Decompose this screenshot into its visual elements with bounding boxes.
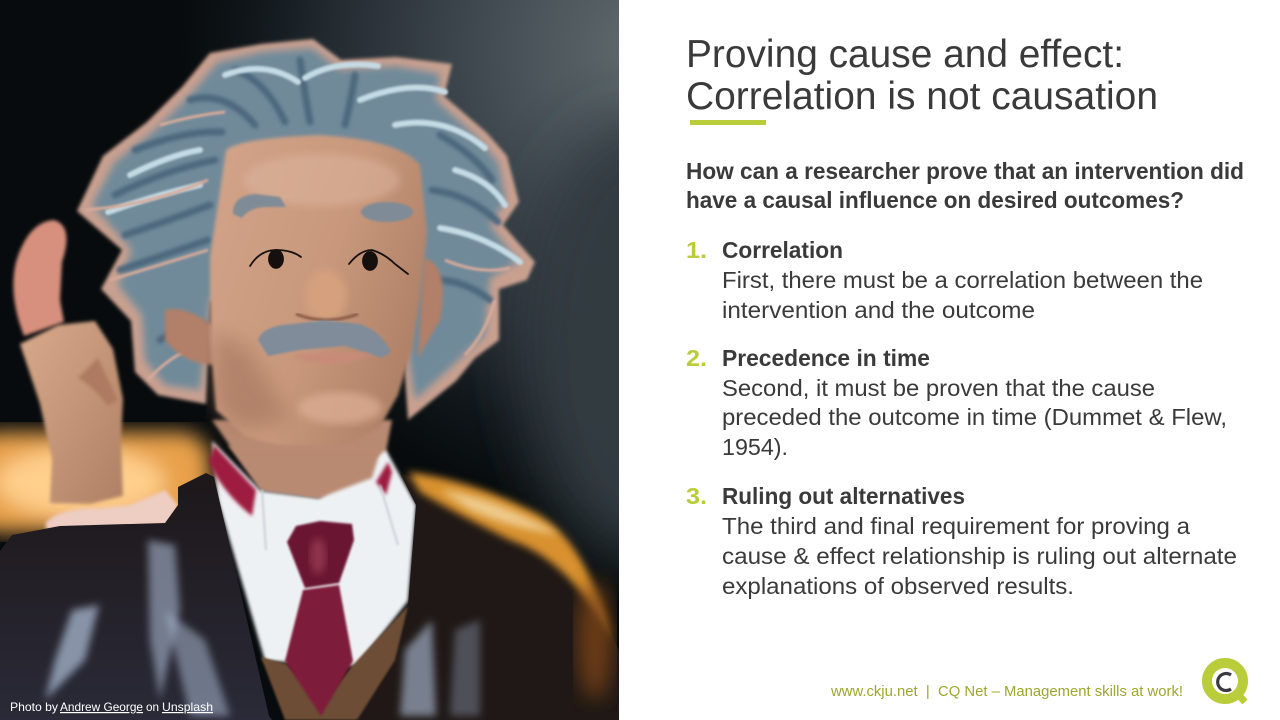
neck inner V [228, 445, 382, 498]
nose [296, 270, 358, 322]
item 3: ruling out alternatives: explanations of observed results. [722, 573, 1074, 599]
title: Proving cause and effect: [686, 33, 1124, 76]
eyes [250, 250, 408, 274]
question [686, 158, 1244, 213]
neck [212, 420, 392, 498]
photo: Einstein figurine [0, 0, 619, 720]
question: How can a researcher prove that an intervention did [686, 158, 1244, 184]
item 3: ruling out alternatives: Ruling out alternatives [722, 483, 965, 509]
item 3: ruling out alternatives [686, 483, 1237, 599]
photo credit [10, 700, 213, 714]
footer: www.ckju.net | CQ Net – Management skills at work! [830, 684, 1183, 700]
forehead highlight [244, 154, 400, 206]
jacket [0, 472, 619, 720]
warm background glow [0, 432, 210, 532]
shirt [212, 441, 416, 666]
item 3: ruling out alternatives: The third and final requirement for proving a [722, 513, 1190, 539]
photo background [0, 0, 619, 720]
jacket blue-white reflections [45, 540, 480, 716]
item 3: ruling out alternatives: cause & effect relationship is ruling out alternate [722, 543, 1237, 569]
background right-side haze [520, 120, 760, 560]
collar stripes [209, 445, 392, 516]
moustache [258, 320, 391, 358]
item 2: precedence in time [686, 345, 1227, 460]
question: have a causal influence on desired outcomes? [686, 187, 1184, 213]
photo credit: on [146, 700, 159, 714]
ears and face [165, 135, 443, 452]
tie [285, 521, 354, 716]
item 1: correlation: First, there must be a correlation between the [722, 267, 1203, 293]
text panel [686, 33, 1248, 704]
eyebrows [233, 194, 413, 222]
item 1: correlation [686, 237, 1203, 323]
item 2: precedence in time: preceded the outcome in time (Dummet & Flew, [722, 404, 1227, 430]
logo: CQ [1207, 663, 1245, 702]
collar fold shadow [262, 485, 398, 550]
title [686, 33, 1158, 118]
item 2: precedence in time: Second, it must be proven that the cause [722, 375, 1155, 401]
hair [77, 39, 535, 420]
cheek and jaw shading [214, 330, 290, 430]
jacket orange highlight [408, 472, 612, 640]
item 1: correlation: 1. [686, 237, 707, 263]
item 1: correlation: Correlation [722, 237, 843, 263]
item 2: precedence in time: Precedence in time [722, 345, 930, 371]
photo credit: Andrew George [60, 700, 143, 714]
waistcoat [261, 606, 408, 720]
chin highlight [298, 392, 382, 424]
hand with raised finger [13, 220, 178, 530]
item 1: correlation: intervention and the outcome [722, 297, 1035, 323]
title: Correlation is not causation [686, 75, 1158, 118]
item 3: ruling out alternatives: 3. [686, 483, 707, 509]
item 2: precedence in time: 1954). [722, 434, 788, 460]
photo credit: Photo by [10, 700, 58, 714]
mouth [290, 352, 372, 364]
item 2: precedence in time: 2. [686, 345, 707, 371]
title underline [690, 120, 766, 125]
photo credit: Unsplash [162, 700, 213, 714]
